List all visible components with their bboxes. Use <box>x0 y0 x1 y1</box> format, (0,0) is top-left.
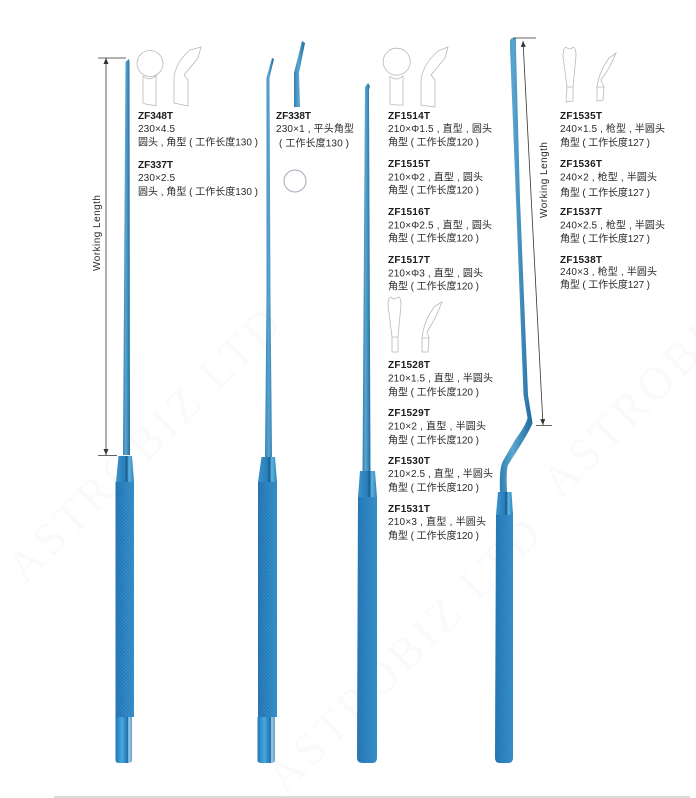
text: ZF1530T: 角型 ( 工作长度120 ) <box>388 481 479 494</box>
text: ZF1516T: 角型 ( 工作长度120 ) <box>388 232 479 244</box>
text: ZF348T: 230×4.5 <box>138 124 175 135</box>
text: ZF1515T <box>388 159 483 196</box>
text: ZF1535T: ZF1535T <box>560 111 602 122</box>
text: ZF338T: ( 工作长度130 ) <box>279 136 349 150</box>
text: ZF1516T <box>388 207 492 244</box>
text: ZF1538T: 240×3 , 枪型 , 半圆头 <box>560 265 657 278</box>
text: ZF1535T: 240×1.5 , 枪型 , 半圆头 <box>560 122 665 135</box>
instrument: ZF1514T group <box>357 83 377 763</box>
text: ZF338T: ZF338T <box>276 111 311 122</box>
knurled handle 1 <box>116 482 134 717</box>
text: ZF1514T <box>388 111 492 148</box>
text: ZF1530T <box>388 456 493 494</box>
thumbnail: ZF1535T tips <box>563 47 616 102</box>
neck 1 <box>116 456 134 482</box>
text: ZF1528T: 角型 ( 工作长度120 ) <box>388 386 479 398</box>
text: ZF1517T: 210×Φ3 , 直型 , 圆头 <box>388 266 483 280</box>
text: ZF1531T: 210×3 , 直型 , 半圆头 <box>388 515 486 528</box>
text: ZF1536T: 240×2 , 枪型 , 半圆头 <box>560 170 657 184</box>
text: ZF337T: 230×2.5 <box>138 173 175 184</box>
text: ZF348T: 圆头 , 角型 ( 工作长度130 ) <box>138 136 258 148</box>
text: ZF1538T <box>560 255 657 291</box>
text: ZF1537T: 240×2.5 , 枪型 , 半圆头 <box>560 218 665 232</box>
text: ZF1536T: 角型 ( 工作长度127 ) <box>560 186 650 199</box>
text: ZF1537T: ZF1537T <box>560 207 602 218</box>
text: ZF348T <box>138 111 258 148</box>
text: ZF1538T: 角型 ( 工作长度127 ) <box>560 278 650 291</box>
text: ZF1517T: ZF1517T <box>388 255 430 266</box>
text: ZF1531T: ZF1531T <box>388 504 430 515</box>
watermark: ASTROBIZ LTD <box>256 505 553 798</box>
text: ZF1528T <box>388 360 493 398</box>
end cap 2 <box>258 717 275 763</box>
text: ZF1535T <box>560 111 665 149</box>
neck 2 <box>258 457 277 482</box>
text: ZF1514T: 角型 ( 工作长度120 ) <box>388 136 479 148</box>
text: ZF1516T: 210×Φ2.5 , 直型 , 圆头 <box>388 218 492 232</box>
text: ZF348T: ZF348T <box>138 111 173 122</box>
text: ZF337T: 圆头 , 角型 ( 工作长度130 ) <box>138 185 258 198</box>
text: ZF338T <box>276 111 354 150</box>
text: ZF1514T: ZF1514T <box>388 111 430 122</box>
footer rule <box>54 796 690 798</box>
text: ZF1530T: 210×2.5 , 直型 , 半圆头 <box>388 467 493 480</box>
dimension: working length left: Working Length <box>92 195 103 271</box>
text: ZF1529T: ZF1529T <box>388 408 430 419</box>
text: ZF1515T: ZF1515T <box>388 159 430 170</box>
text: ZF1514T: 210×Φ1.5 , 直型 , 圆头 <box>388 122 492 135</box>
neck 4 <box>496 492 513 515</box>
knurled handle 2 <box>258 482 277 717</box>
text: ZF1531T <box>388 504 486 542</box>
shaft 1 <box>123 59 130 455</box>
text: ZF1516T: ZF1516T <box>388 207 430 218</box>
thumbnail: ZF1514T tips <box>383 47 448 107</box>
knurled handle 3 <box>357 497 377 763</box>
thumbnail: ZF1528T tips <box>388 297 442 352</box>
text: ZF1535T: 角型 ( 工作长度127 ) <box>560 136 650 149</box>
instrument: ZF338T <box>258 58 277 763</box>
dimension: working length left <box>92 58 126 456</box>
text: ZF337T <box>138 160 258 198</box>
text: ZF1530T: ZF1530T <box>388 456 430 467</box>
enlarged tip ZF338T <box>294 41 305 107</box>
text: ZF1517T <box>388 255 483 292</box>
knurled handle 4 <box>495 515 513 763</box>
text: ZF1538T: ZF1538T <box>560 255 602 266</box>
text: ZF1515T: 角型 ( 工作长度120 ) <box>388 184 479 196</box>
text: ZF1537T <box>560 207 665 245</box>
text: ZF1517T: 角型 ( 工作长度120 ) <box>388 280 479 292</box>
text: ZF1537T: 角型 ( 工作长度127 ) <box>560 232 650 245</box>
instrument: ZF348T / ZF337T <box>116 59 134 763</box>
text: ZF1529T: 角型 ( 工作长度120 ) <box>388 434 479 446</box>
text: ZF337T: ZF337T <box>138 160 173 171</box>
thumbnail: ZF348T tips <box>137 47 201 106</box>
text: ZF1529T <box>388 408 486 446</box>
end cap 1 <box>116 717 132 763</box>
watermark <box>0 289 696 798</box>
bent shaft 4 <box>500 38 532 492</box>
watermark: ASTROBIZ LTD <box>0 295 293 592</box>
neck 3 <box>358 471 377 497</box>
text: ZF1536T: ZF1536T <box>560 159 602 170</box>
text: ZF1536T <box>560 159 657 199</box>
shaft 3 <box>362 83 370 471</box>
shaft 2 <box>265 58 274 457</box>
dimension: working length right: Working Length <box>539 142 550 218</box>
text: ZF1528T: ZF1528T <box>388 360 430 371</box>
icon: flat tip circle <box>284 170 306 192</box>
text: ZF1531T: 角型 ( 工作长度120 ) <box>388 529 479 542</box>
dimension: working length right <box>513 38 552 426</box>
instrument: ZF1535T group <box>495 38 532 763</box>
text: ZF338T: 230×1 , 平头角型 <box>276 122 354 135</box>
text: ZF1515T: 210×Φ2 , 直型 , 圆头 <box>388 170 483 184</box>
text: ZF1528T: 210×1.5 , 直型 , 半圆头 <box>388 372 493 384</box>
text: ZF1529T: 210×2 , 直型 , 半圆头 <box>388 420 486 432</box>
